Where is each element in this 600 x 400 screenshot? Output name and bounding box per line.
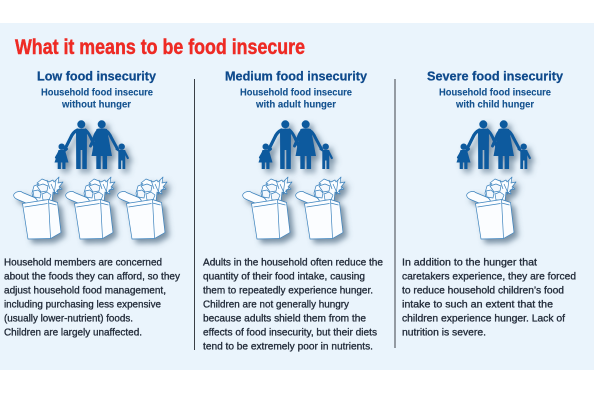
icon: two grocery bags: [243, 177, 345, 239]
text: severe description: intake to such an extent that the: [402, 300, 553, 310]
panel: medium food insecurity: [203, 70, 383, 352]
text: medium description: quantity of their food intake, causing: [203, 272, 365, 282]
text: low description: Children are largely unaffected.: [4, 328, 142, 338]
panel: severe food insecurity: [402, 70, 576, 338]
icon: family: [54, 120, 128, 169]
text: low description: [4, 258, 181, 338]
subheading: severe: [439, 86, 551, 111]
text: severe description: caretakers experience, they are forced: [402, 272, 576, 282]
text: medium description: [203, 258, 383, 352]
text: medium description: tend to be extremely poor in nutrients.: [203, 342, 373, 352]
text: low description: adjust household food management,: [4, 286, 166, 296]
text: medium description: because adults shield them from the: [203, 314, 366, 324]
text: low description: about the foods they can afford, so they: [4, 272, 181, 282]
heading: low: Low food insecurity: [37, 70, 156, 84]
text: severe description: to reduce household children’s food: [402, 286, 564, 296]
icon: one grocery bag: [467, 177, 516, 239]
heading: severe: Severe food insecurity: [427, 70, 563, 84]
icon: family: [456, 120, 530, 169]
text: low description: Household members are concerned: [4, 258, 162, 268]
text: low description: including purchasing less expensive: [4, 300, 161, 310]
subheading: low: Household food insecure: [41, 86, 153, 98]
text: severe description: In addition to the hunger that: [402, 258, 537, 268]
text: low description: (usually lower-nutrient) foods.: [4, 314, 133, 324]
text: medium description: them to repeatedly experience hunger.: [203, 286, 373, 296]
subheading: low: [41, 86, 153, 111]
text: medium description: Children are not generally hungry: [203, 300, 350, 310]
heading: medium: Medium food insecurity: [225, 70, 367, 84]
subheading: medium: [240, 86, 352, 111]
icon: family: [258, 120, 332, 169]
text: severe description: children experience hunger. Lack of: [402, 314, 565, 324]
text: severe description: nutrition is severe.: [402, 328, 486, 338]
text: severe description: [402, 258, 576, 338]
text: medium description: effects of food insecurity, but their diets: [203, 328, 377, 338]
text: medium description: Adults in the household often reduce the: [203, 258, 383, 268]
subheading: low: without hunger: [61, 99, 131, 111]
subheading: severe: with child hunger: [455, 99, 534, 111]
panel: low food insecurity: [4, 70, 181, 338]
icon: three grocery bags: [14, 177, 167, 239]
title: What it means to be food insecure: [15, 36, 305, 59]
subheading: severe: Household food insecure: [439, 86, 551, 98]
subheading: medium: with adult hunger: [255, 99, 336, 111]
subheading: medium: Household food insecure: [240, 86, 352, 98]
